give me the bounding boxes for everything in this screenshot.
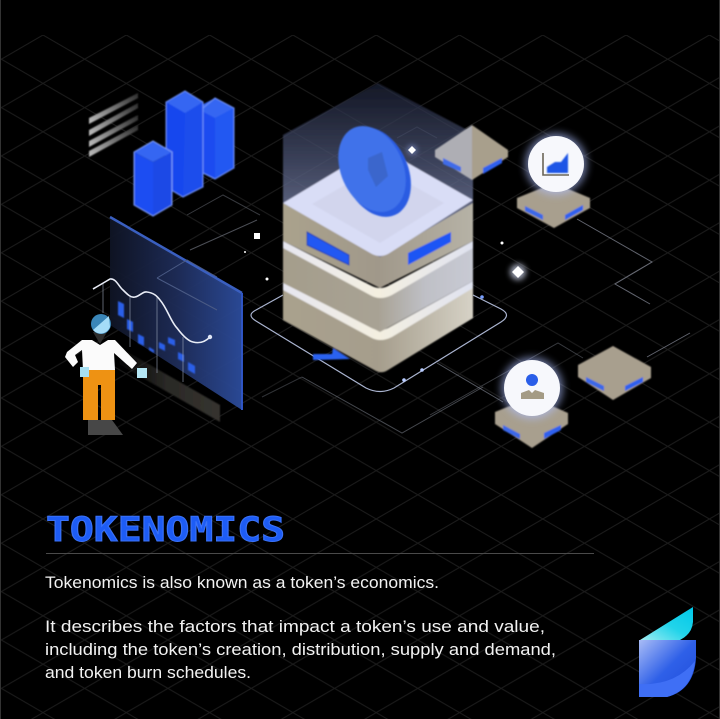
middle layer [283, 245, 473, 332]
base platform outline [251, 295, 506, 392]
column right [196, 98, 234, 179]
glass enclosure [283, 83, 473, 257]
title: TOKENOMICS [46, 510, 285, 550]
cube half outside glass [472, 125, 508, 180]
circuit lines [187, 127, 690, 433]
central server stack [283, 83, 473, 372]
window right [408, 232, 451, 265]
badge glow [525, 133, 587, 195]
screen shadow [115, 345, 220, 422]
bar chart: 3D blue columns [134, 91, 234, 216]
second band [283, 281, 473, 340]
user icon [521, 374, 544, 399]
neck [93, 332, 107, 344]
cube half seen through glass [435, 125, 472, 180]
chart icon [543, 153, 569, 175]
head [91, 314, 111, 334]
person presenter [65, 314, 147, 435]
base bracket [313, 348, 350, 360]
trend curve [93, 279, 210, 343]
coin [325, 115, 424, 228]
top face [283, 146, 473, 256]
inset face [312, 166, 444, 243]
shoes [88, 420, 123, 435]
candlesticks [118, 301, 195, 374]
sparkles [244, 145, 526, 280]
top-right cube [435, 125, 508, 180]
drop lines [103, 283, 183, 382]
body text: Tokenomics is also known as a token’s economics. [45, 573, 439, 592]
trousers [83, 370, 115, 420]
body text [45, 573, 556, 682]
top layer [283, 203, 473, 288]
cube base [517, 183, 590, 228]
column tall [166, 91, 203, 197]
logo [639, 607, 696, 697]
body text: It describes the factors that impact a token’s use and value, [45, 617, 545, 636]
divider [46, 553, 594, 554]
badge glow [501, 357, 563, 419]
column left [134, 141, 172, 216]
node: blank cube [578, 346, 651, 400]
shirt [65, 340, 137, 370]
bottom layer [283, 285, 473, 372]
hands [80, 367, 89, 377]
body text: and token burn schedules. [45, 663, 251, 682]
cube base [495, 397, 568, 448]
chart panel [93, 217, 242, 410]
node: user badge [495, 357, 568, 448]
first band [283, 241, 473, 298]
badge disc [504, 360, 560, 416]
body text: including the token’s creation, distribution, supply and demand, [45, 640, 556, 659]
badge disc [528, 136, 584, 192]
decorative stripes [89, 93, 138, 157]
node: chart badge [517, 133, 590, 228]
window left [307, 232, 349, 265]
